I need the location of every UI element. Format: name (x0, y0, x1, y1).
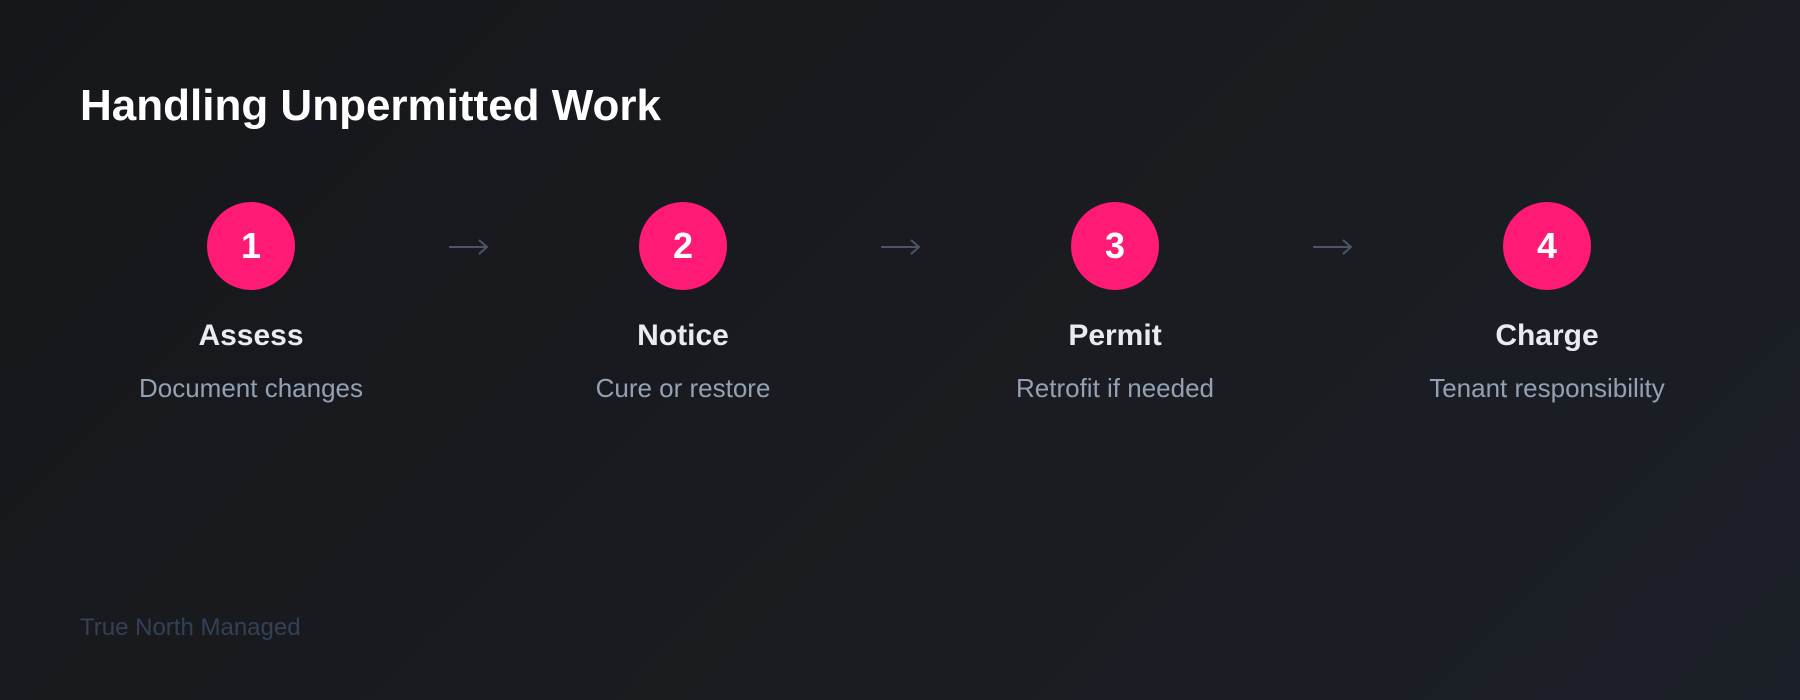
step 2: Cure or restore (596, 373, 770, 403)
step 4 (1429, 202, 1665, 403)
step 2: 2 (673, 225, 693, 266)
footer: True North Managed (80, 614, 301, 641)
step 1: 1 (241, 225, 261, 266)
step 2: Notice (637, 319, 729, 352)
step 1: Document changes (139, 373, 363, 403)
step 2 (596, 202, 770, 403)
step 3: Retrofit if needed (1016, 373, 1214, 403)
arrow 3 (1313, 239, 1352, 255)
step 3 (1016, 202, 1214, 403)
step 1: Assess (198, 319, 304, 352)
title: Handling Unpermitted Work (80, 81, 661, 130)
step 4: Tenant responsibility (1429, 373, 1665, 403)
step 1 (139, 202, 363, 403)
step 3: 3 (1105, 225, 1125, 266)
arrow 1 (449, 239, 488, 255)
step 4: 4 (1537, 225, 1557, 266)
arrow 2 (881, 239, 920, 255)
step 4: Charge (1495, 319, 1599, 352)
step 3: Permit (1068, 319, 1162, 352)
